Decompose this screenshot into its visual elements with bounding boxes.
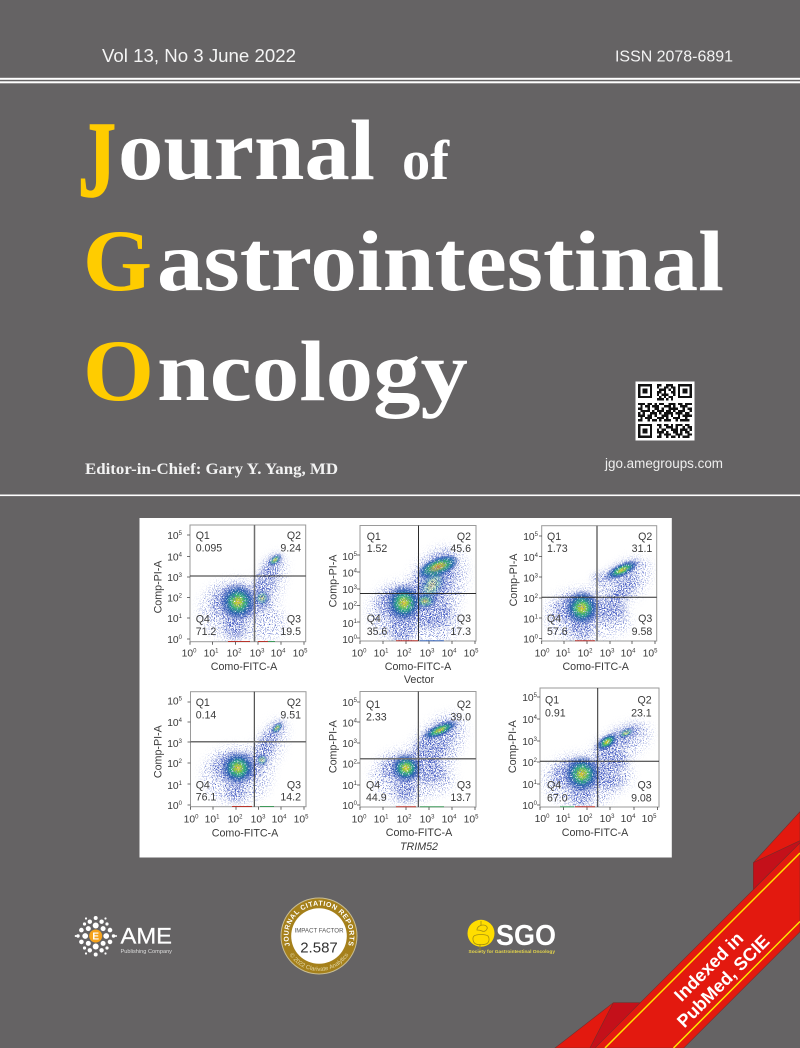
scatter plot: Vector 3: 10	[535, 648, 546, 660]
scatter plot: TRIM52 3: 0.91	[545, 708, 566, 720]
scatter plot: TRIM52 2: 3	[431, 814, 435, 820]
scatter plot: Vector 3: 4	[632, 648, 636, 654]
scatter plot: Vector 2: 0	[363, 648, 367, 654]
scatter plot: Vector 1: 4	[179, 552, 183, 558]
scatter plot: Vector 1: Q2	[287, 530, 301, 542]
scatter plot: TRIM52 2: Como-FITC-A	[386, 827, 453, 839]
scatter plot: TRIM52 1: 10	[228, 814, 239, 826]
scatter plot: Vector 3: 5	[654, 648, 658, 654]
scatter plot: Vector 2: 10	[342, 602, 354, 612]
badge: impact factor: 2.587	[300, 940, 338, 957]
scatter plot: Vector 3: 3	[611, 648, 615, 654]
scatter plot: TRIM52 3: 67.0	[547, 793, 568, 805]
scatter plot: Vector 2: 1	[354, 619, 358, 625]
scatter plot: TRIM52 1: 14.2	[280, 792, 301, 804]
scatter plot: TRIM52 3: 4	[534, 715, 538, 721]
scatter plot: Vector 1: 10	[167, 594, 179, 604]
scatter plot: TRIM52 1: 10	[294, 814, 305, 826]
scatter plot: TRIM52 3: Como-FITC-A	[562, 827, 629, 839]
scatter plot: TRIM52 2	[328, 692, 479, 853]
scatter plot: Vector 2: 5	[475, 648, 479, 654]
scatter plot: Vector 3: 10	[600, 648, 611, 660]
scatter plot: TRIM52 1: 10	[167, 718, 179, 729]
scatter plot: Vector 3: 31.1	[632, 543, 652, 555]
journal title: of	[402, 130, 450, 192]
scatter plot: Vector 2: 10	[420, 648, 431, 660]
scatter plot: TRIM52 3: 0	[534, 801, 538, 807]
scatter plot: TRIM52 1: 4	[283, 814, 287, 820]
scatter plot: TRIM52 2: 2	[354, 760, 358, 766]
scatter plot: TRIM52 1: 9.51	[280, 709, 301, 721]
badge: impact factor: JOURNAL CITATION REPORTS	[284, 900, 354, 946]
scatter plot: TRIM52 3: 10	[522, 737, 534, 748]
scatter plot: Vector 1: 3	[179, 573, 183, 579]
journal title: ncology	[157, 323, 468, 419]
scatter plot: TRIM52 1: 4	[179, 718, 183, 724]
scatter plot: TRIM52 3: 10	[522, 758, 534, 769]
scatter plot: TRIM52 2: 10	[342, 801, 354, 812]
scatter plot: TRIM52 3: Q2	[638, 694, 652, 706]
scatter plot: TRIM52 2: 5	[475, 814, 479, 820]
scatter plot: Vector 1: 3	[261, 648, 265, 654]
scatter plot: TRIM52 1: Q3	[287, 779, 301, 791]
scatter plot: TRIM52 1: 10	[184, 814, 195, 826]
scatter plot: Vector 3: 0	[546, 648, 550, 654]
scatter plot: Vector 1: 0	[179, 635, 183, 641]
scatter plot: Vector 3: 1	[567, 648, 571, 654]
scatter plot: TRIM52 2: Comp-PI-A	[328, 719, 340, 773]
scatter plot: Vector 1: 10	[271, 648, 282, 660]
scatter plot: TRIM52 3: 10	[578, 814, 589, 825]
scatter plot: Vector 3: 9.58	[632, 626, 652, 638]
badge: impact factor: © 2022 Clarivate Analytics	[290, 953, 348, 971]
scatter plot: TRIM52 1: 10	[167, 781, 179, 792]
scatter plot: TRIM52 2: 4	[453, 814, 457, 820]
scatter plot: TRIM52 3: Q1	[545, 694, 559, 706]
scatter plot: TRIM52 1: 10	[251, 814, 262, 826]
scatter plot: TRIM52 2: 10	[374, 814, 385, 826]
scatter plot: Vector 2: 17.3	[450, 626, 471, 638]
scatter plot: Vector 2: 10	[442, 648, 453, 660]
scatter plot: Vector 2: 3	[354, 585, 358, 591]
scatter plot: TRIM52 3: 0	[546, 814, 550, 820]
scatter plot: Vector 1: 10	[167, 635, 179, 646]
scatter plot: Vector 2: Q1	[367, 531, 381, 543]
scatter plot: TRIM52 1: 10	[272, 814, 283, 826]
scatter plot: Vector 2: 10	[342, 585, 354, 596]
scatter plot: Vector 2: Q4	[367, 613, 381, 625]
scatter plot: Vector 3: Q2	[638, 531, 652, 543]
scatter plot: TRIM52 3: 1	[534, 780, 538, 786]
scatter plot: Vector 2: 5	[354, 552, 358, 558]
scatter plot: Vector 3: Como-FITC-A	[562, 661, 630, 673]
scatter plot: TRIM52 2: 2	[408, 814, 412, 820]
scatter plot: Vector 2: Q2	[457, 531, 471, 543]
scatter plot: TRIM52 2: 4	[354, 718, 358, 724]
scatter plot: TRIM52 2: 1	[385, 814, 389, 820]
scatter plot: TRIM52 2: 5	[354, 698, 358, 704]
scatter plot: Vector 3: 2	[535, 594, 539, 600]
scatter plot: Vector 3: 5	[535, 532, 539, 538]
scatter plot: Vector 2: 10	[342, 552, 354, 563]
icon: AME dots	[75, 916, 117, 956]
scatter plot: TRIM52 3: 23.1	[631, 708, 652, 720]
journal title: G	[83, 213, 152, 310]
scatter plot: Vector 3: 10	[578, 648, 589, 660]
scatter plot: TRIM52 3: 10	[522, 801, 534, 812]
scatter plot: TRIM52 2: 10	[464, 814, 475, 826]
scatter plot: Vector 3: 4	[535, 553, 539, 559]
scatter plot: Vector 2: 10	[397, 648, 408, 660]
scatter plot: Vector 3	[508, 526, 660, 673]
scatter plot: Vector 3: 1	[535, 614, 539, 620]
scatter plot: Vector 1: 10	[182, 648, 193, 660]
scatter plot: Vector 1: 1	[215, 648, 219, 654]
scatter plot: TRIM52 3: Comp-PI-A	[507, 719, 519, 773]
scatter plot: Vector 3: Q1	[547, 531, 561, 543]
scatter plot: Vector 2: 10	[352, 648, 363, 660]
scatter plot: Vector 1: 10	[167, 552, 179, 564]
scatter plot: TRIM52 1: 5	[305, 814, 309, 820]
scatter plot: Vector 3: 10	[523, 574, 535, 584]
scatter plot: Vector 3: 10	[523, 614, 535, 626]
scatter plot: Vector 2: 2	[408, 648, 412, 654]
scatter plot: TRIM52 1: 5	[179, 696, 183, 702]
logo: AME Publishing Company: Publishing Company	[120, 949, 172, 955]
logo: SGO	[468, 920, 556, 955]
scatter plot: Vector 3: 10	[621, 648, 632, 660]
scatter plot: TRIM52 3: 2	[534, 758, 538, 764]
scatter plot: TRIM52 3: 10	[556, 814, 567, 825]
scatter plot: TRIM52 1: 10	[167, 801, 179, 812]
scatter plot: TRIM52 1: 10	[167, 739, 179, 750]
journal title: ournal	[118, 102, 375, 198]
scatter plot: TRIM52 1: Q1	[196, 697, 210, 709]
scatter plot: Vector 1: 71.2	[196, 626, 216, 638]
scatter plot: Vector 3: 10	[643, 648, 654, 660]
scatter plot: TRIM52 2: 3	[354, 739, 358, 745]
scatter plot: Vector 3: Q4	[547, 613, 561, 625]
scatter plot: Vector 1: 2	[179, 594, 183, 600]
scatter plot: TRIM52 2: 44.9	[366, 792, 387, 804]
scatter plot: TRIM52 2: 1	[354, 781, 358, 787]
scatter plot: TRIM52 2: Q3	[457, 779, 471, 791]
scatter plot: TRIM52 2: TRIM52	[400, 841, 438, 853]
scatter plot: Vector 2: Vector	[404, 674, 435, 686]
scatter plot: TRIM52 2: 10	[342, 718, 354, 730]
ribbon text: PubMed, SCIE	[673, 931, 773, 1031]
scatter plot: TRIM52 3: 2	[589, 814, 593, 820]
badge: impact factor	[280, 898, 358, 974]
scatter plot: TRIM52 2: 0	[354, 801, 358, 807]
scatter plot: Vector 2: Q3	[457, 613, 471, 625]
scatter plot: Vector 1: 10	[293, 648, 304, 660]
scatter plot: TRIM52 3: 4	[632, 814, 636, 820]
scatter plot: Vector 2	[328, 526, 480, 686]
scatter plot: Vector 1: 5	[179, 531, 183, 537]
scatter plot: TRIM52 1: 10	[205, 814, 216, 826]
scatter plot: Vector 3: Comp-PI-A	[508, 553, 520, 606]
panel: flow cytometry figure	[140, 518, 672, 858]
scatter plot: TRIM52 3: Q4	[547, 779, 561, 791]
scatter plot: TRIM52 3: Q3	[638, 779, 652, 791]
scatter plot: Vector 3: 10	[523, 594, 535, 605]
scatter plot: Vector 3: 2	[589, 648, 593, 654]
scatter plot: Vector 1: Como-FITC-A	[211, 661, 278, 673]
scatter plot: Vector 3: Q3	[638, 613, 652, 625]
scatter plot: Vector 1: 10	[167, 614, 179, 625]
scatter plot: TRIM52 1: Como-FITC-A	[212, 828, 279, 840]
scatter plot: Vector 2: 4	[453, 648, 457, 654]
scatter plot: Vector 3: 10	[523, 634, 535, 646]
scatter plot: Vector 2: 10	[374, 648, 385, 660]
scatter plot: Vector 2: 1.52	[367, 543, 387, 555]
scatter plot: TRIM52 3: 10	[522, 693, 534, 704]
ISSN: ISSN 2078-6891	[615, 48, 733, 66]
scatter plot: Vector 1: 4	[282, 648, 286, 654]
scatter plot: Vector 3: 10	[523, 532, 535, 543]
scatter plot: TRIM52 3: 9.08	[631, 793, 652, 805]
scatter plot: Vector 2: 10	[342, 635, 354, 646]
scatter plot: Vector 1: 2	[238, 648, 242, 654]
logo: AME Publishing Company: AME	[120, 923, 172, 948]
scatter plot: Vector 2: 4	[354, 568, 358, 574]
scatter plot: Vector 2: Comp-PI-A	[328, 554, 340, 607]
scatter plot: Vector 2: 2	[354, 602, 358, 608]
icon: digestive tract	[468, 920, 494, 950]
logo: SGO: SGO	[496, 920, 556, 952]
scatter plot: TRIM52 2: 39.0	[450, 712, 471, 724]
scatter plot: TRIM52 3: 3	[611, 814, 615, 820]
scatter plot: Vector 1: Q3	[287, 613, 301, 625]
scatter plot: TRIM52 2: 0	[363, 814, 367, 820]
scatter plot: TRIM52 1: Q4	[196, 779, 210, 791]
scatter plot: Vector 2: 1	[385, 648, 389, 654]
scatter plot: TRIM52 2: 10	[342, 698, 354, 709]
scatter plot: Vector 1: Comp-PI-A	[153, 560, 165, 613]
scatter plot: Vector 1: Q1	[196, 530, 210, 542]
scatter plot: TRIM52 3: 5	[534, 693, 538, 699]
scatter plot: TRIM52 1: Comp-PI-A	[153, 724, 165, 778]
scatter plot: TRIM52 1: 0	[179, 801, 183, 807]
scatter plot: TRIM52 2: 10	[342, 739, 354, 750]
scatter plot: TRIM52 3: 10	[535, 814, 546, 825]
scatter plot: TRIM52 2: Q1	[366, 699, 380, 711]
scatter plot: TRIM52 1: 3	[262, 814, 266, 820]
scatter plot: TRIM52 2: 10	[342, 760, 354, 770]
scatter plot: Vector 1: 1	[179, 614, 183, 620]
logo: AME Publishing Company: E	[92, 932, 99, 942]
scatter plot: Vector 1: Q4	[196, 613, 210, 625]
scatter plot: TRIM52 2: 2.33	[366, 712, 387, 724]
journal title: astrointestinal	[157, 213, 724, 309]
scatter plot: TRIM52 1: 1	[216, 814, 220, 820]
scatter plot: TRIM52 1: 10	[167, 759, 179, 770]
scatter plot: TRIM52 3: 10	[621, 814, 632, 825]
scatter plot: TRIM52 2: 10	[442, 814, 453, 826]
scatter plot: Vector 2: 45.6	[450, 543, 471, 555]
logo: SGO: Society for Gastrointestinal Oncology	[468, 949, 555, 955]
scatter plot: TRIM52 2: 10	[342, 781, 354, 792]
logo: AME Publishing Company	[75, 916, 172, 956]
scatter plot: Vector 3: 10	[523, 553, 535, 564]
journal title	[78, 101, 724, 420]
scatter plot: Vector 1: 9.24	[280, 543, 301, 555]
scatter plot: TRIM52 3: 5	[653, 814, 657, 820]
scatter plot: Vector 1: 0	[193, 648, 197, 654]
journal title: J	[78, 101, 116, 220]
scatter plot: TRIM52 1: 76.1	[196, 792, 216, 804]
scatter plot: TRIM52 3: 10	[522, 780, 534, 791]
website: jgo.amegroups.com	[604, 456, 723, 471]
scatter plot: Vector 3: 10	[556, 648, 567, 660]
scatter plot: TRIM52 2: Q4	[366, 779, 380, 791]
scatter plot: Vector 2: 3	[431, 648, 435, 654]
scatter plot: TRIM52 3: 3	[534, 737, 538, 743]
scatter plot: Vector 2: 35.6	[367, 626, 387, 638]
scatter plot: TRIM52 2: 10	[352, 814, 363, 826]
scatter plot: TRIM52 3: 10	[600, 814, 611, 825]
scatter plot: TRIM52 2: 10	[397, 814, 408, 826]
scatter plot: Vector 2: 0	[354, 635, 358, 641]
scatter plot: TRIM52 2: 10	[420, 814, 431, 826]
scatter plot: Vector 1: 0.095	[196, 543, 222, 555]
scatter plot: Vector 3: 1.73	[547, 543, 568, 555]
scatter plot: TRIM52 3: 10	[522, 715, 534, 726]
scatter plot: TRIM52 1: 2	[239, 814, 243, 820]
scatter plot: Vector 1: 10	[204, 648, 215, 660]
scatter plot: TRIM52 3: 1	[567, 814, 571, 820]
scatter plot: Vector 1: 10	[167, 573, 179, 584]
scatter plot: Vector 2: 10	[342, 568, 354, 580]
scatter plot: Vector 2: 10	[464, 648, 475, 660]
scatter plot: TRIM52 1: 1	[179, 781, 183, 787]
scatter plot: Vector 2: Como-FITC-A	[385, 661, 452, 673]
icon: QR code	[636, 382, 694, 440]
scatter plot: Vector 1: 19.5	[280, 626, 301, 638]
scatter plot: Vector 2: 10	[342, 619, 354, 630]
scatter plot: TRIM52 2: Q2	[457, 699, 471, 711]
ribbon: indexing banner	[555, 812, 800, 1048]
issue line: Vol 13, No 3 June 2022	[102, 46, 296, 66]
scatter plot: Vector 1	[153, 525, 308, 673]
scatter plot: TRIM52 1	[153, 692, 309, 840]
scatter plot: TRIM52 3	[507, 688, 659, 839]
scatter plot: TRIM52 2: 13.7	[450, 792, 471, 804]
scatter plot: TRIM52 1: 10	[167, 696, 179, 708]
scatter plot: TRIM52 1: Q2	[287, 697, 301, 709]
scatter plot: TRIM52 1: 2	[179, 759, 183, 765]
scatter plot: Vector 1: 5	[304, 648, 308, 654]
scatter plot: Vector 1: 10	[250, 648, 261, 660]
scatter plot: TRIM52 1: 0.14	[196, 709, 216, 721]
scatter plot: Vector 1: 10	[227, 648, 238, 660]
scatter plot: Vector 3: 0	[535, 634, 539, 640]
journal title: O	[83, 323, 154, 420]
scatter plot: TRIM52 1: 0	[195, 814, 199, 820]
ribbon text: Indexed in	[670, 928, 747, 1005]
editor-in-chief: Editor-in-Chief: Gary Y. Yang, MD	[85, 461, 338, 478]
badge: impact factor: IMPACT FACTOR	[294, 928, 344, 935]
scatter plot: Vector 3: 57.6	[547, 626, 568, 638]
scatter plot: Vector 1: 10	[167, 531, 179, 542]
scatter plot: TRIM52 1: 3	[179, 739, 183, 745]
scatter plot: TRIM52 3: 10	[642, 814, 653, 825]
scatter plot: Vector 3: 3	[535, 574, 539, 580]
